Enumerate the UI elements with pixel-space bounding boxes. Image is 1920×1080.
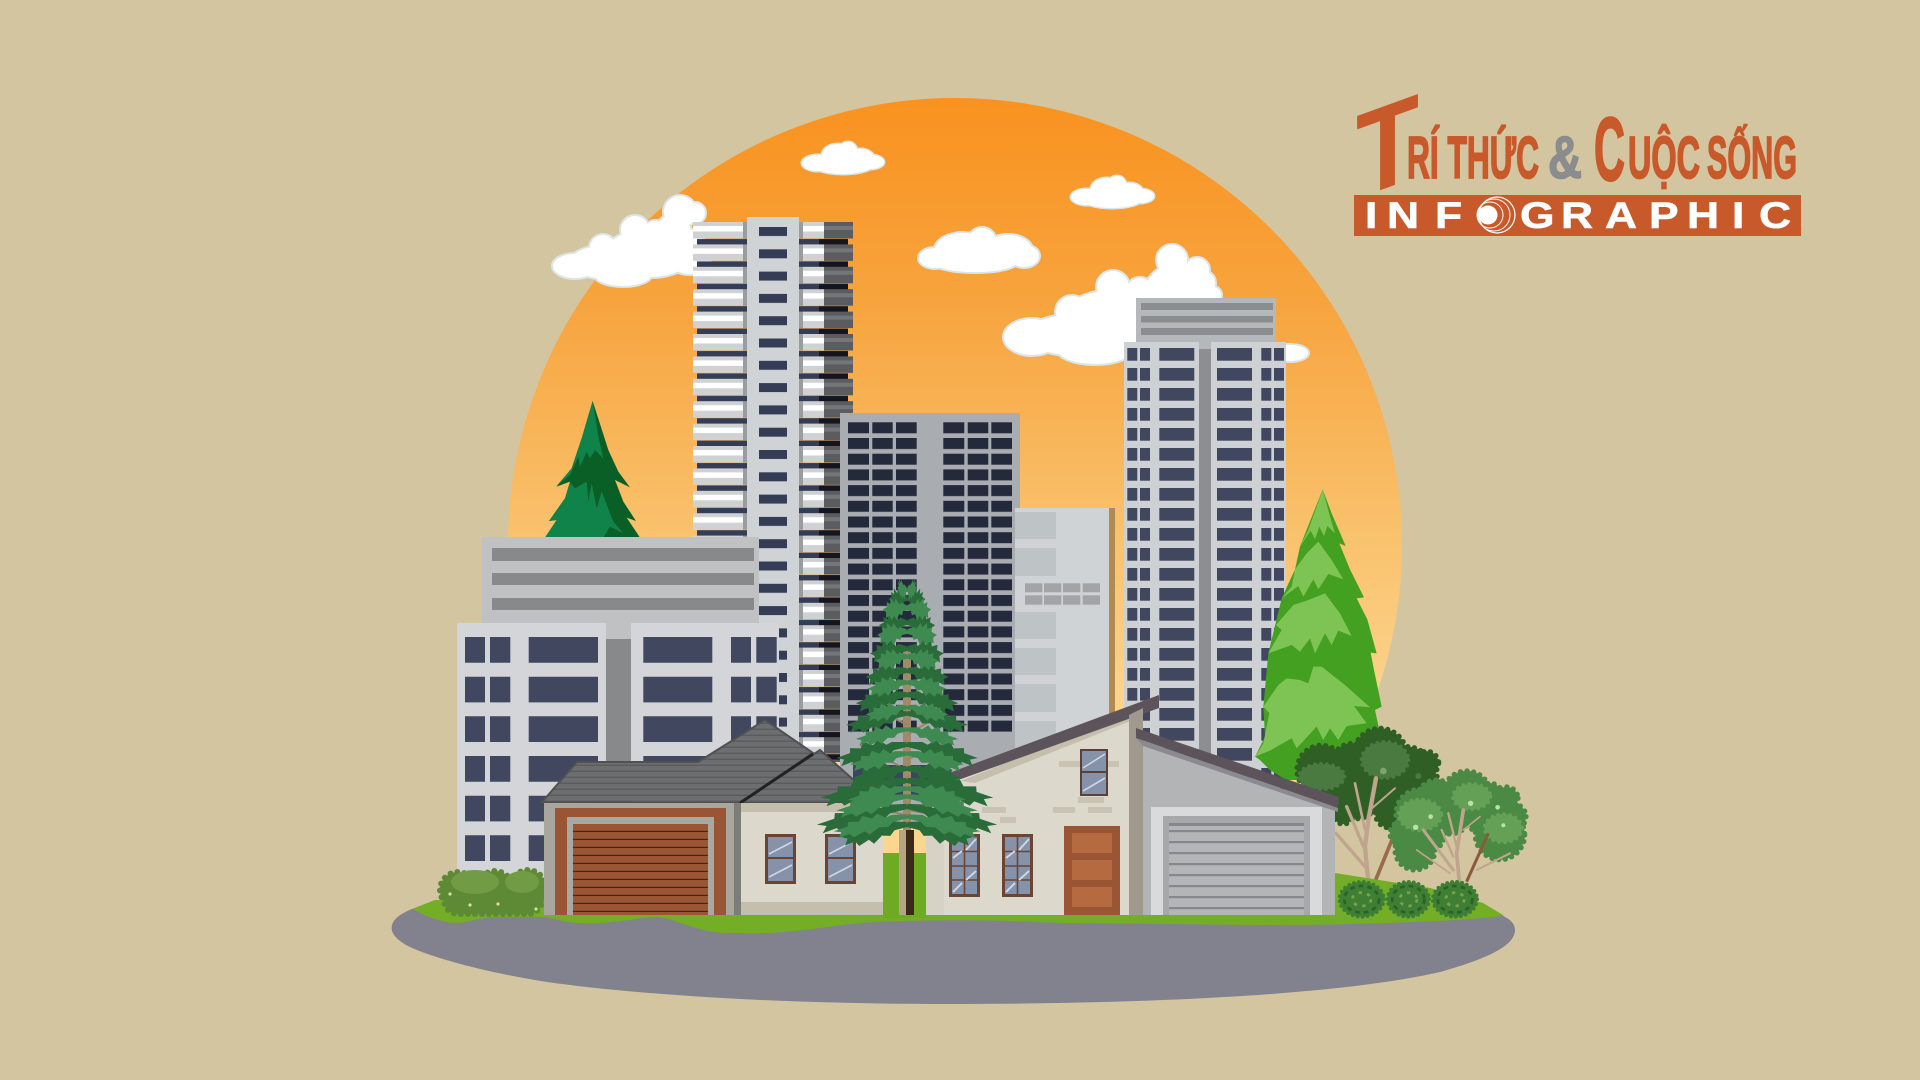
tree: bright green pine	[1255, 489, 1382, 780]
garage roof	[1136, 728, 1339, 812]
main wall	[926, 712, 1129, 915]
garage door	[1151, 807, 1322, 915]
logo wordmark: SỐNG	[1707, 125, 1797, 191]
logo wordmark: UỘC	[1628, 124, 1700, 191]
light foliage	[832, 577, 982, 843]
bricks	[982, 761, 1119, 823]
roof	[542, 720, 885, 803]
lower windows	[949, 834, 1033, 897]
tree: dark pine behind left building	[545, 401, 640, 538]
logo banner: INF OGRAPHIC	[1365, 195, 1791, 236]
building: dark window tower	[840, 413, 1020, 825]
logo wordmark: &	[1548, 125, 1582, 191]
building: light grey block	[1015, 508, 1115, 788]
bushes: three small round shrubs	[1340, 882, 1477, 917]
upper window	[1080, 749, 1108, 796]
house: right house with garage	[926, 695, 1339, 915]
left post	[926, 795, 944, 915]
clouds	[553, 142, 1308, 364]
building: striped white tower	[693, 217, 853, 777]
tree: dark green round tree	[1297, 728, 1439, 882]
ground: road island	[392, 909, 1515, 1004]
building: right tower	[1124, 298, 1286, 790]
windows	[765, 834, 856, 884]
ground: grass patch between houses	[883, 853, 927, 918]
tree: mid green round tree	[1390, 771, 1526, 882]
tree: centre tall pine	[814, 577, 1000, 915]
trunk	[855, 650, 965, 915]
house: left house with garage	[542, 720, 885, 915]
logo: Tri Thuc & Cuoc Song Infographic	[1354, 69, 1801, 236]
icon: infographic O rings	[1477, 197, 1515, 233]
bush: left hedge	[440, 870, 546, 914]
garage	[544, 803, 741, 915]
roof	[949, 695, 1159, 783]
logo wordmark: C	[1594, 100, 1625, 200]
corner column	[1129, 708, 1143, 915]
logo wordmark: T	[1356, 69, 1419, 225]
ground: grass	[412, 873, 1510, 945]
garage wall	[1143, 743, 1335, 915]
dark foliage	[814, 586, 1000, 851]
front door	[1064, 826, 1120, 915]
house body	[741, 803, 883, 915]
building: wide front-left block	[457, 537, 779, 903]
logo wordmark: RÍ THỨC	[1407, 125, 1539, 191]
logo wordmark	[1356, 69, 1797, 225]
sun circle	[508, 98, 1402, 992]
